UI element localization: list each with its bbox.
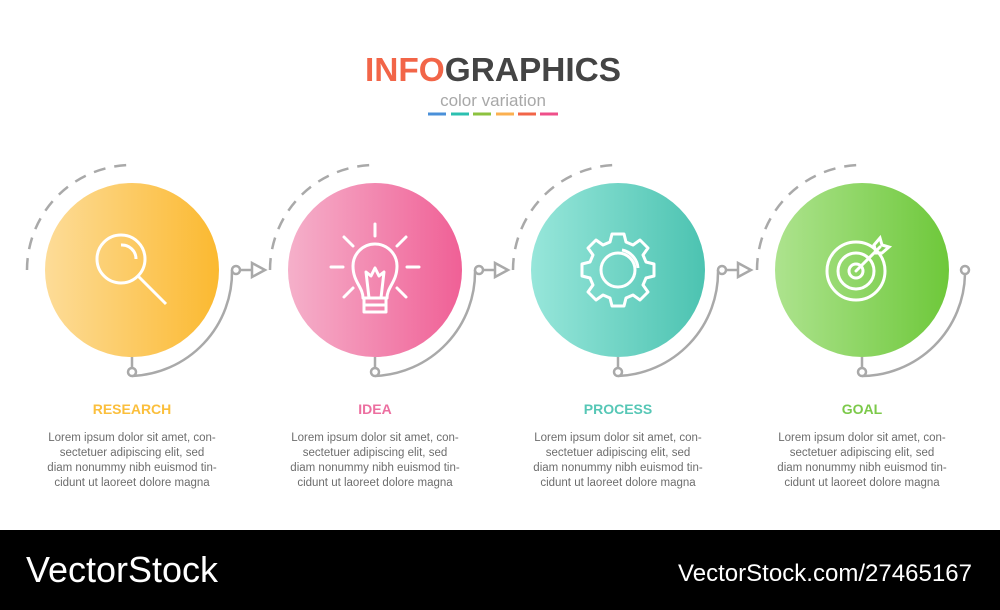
text goal: diam nonummy nibh euismod tin- xyxy=(777,462,947,474)
text research: cidunt ut laoreet dolore magna xyxy=(54,477,210,489)
text goal: sectetuer adipiscing elit, sed xyxy=(790,447,934,459)
text idea: cidunt ut laoreet dolore magna xyxy=(297,477,453,489)
text goal: cidunt ut laoreet dolore magna xyxy=(784,477,940,489)
label research: RESEARCH xyxy=(93,401,171,417)
title: INFOGRAPHICS xyxy=(365,51,621,88)
connectors 3 xyxy=(513,165,751,376)
icon: light bulb xyxy=(331,224,419,312)
footer bar xyxy=(0,530,1000,610)
circle 1 xyxy=(45,183,219,357)
text process: sectetuer adipiscing elit, sed xyxy=(546,447,690,459)
connectors 1 xyxy=(27,165,265,376)
step 3: process xyxy=(513,165,751,489)
step 1: research xyxy=(27,165,265,489)
text process: Lorem ipsum dolor sit amet, con- xyxy=(534,432,702,444)
icon: magnifier xyxy=(97,235,166,304)
text research: sectetuer adipiscing elit, sed xyxy=(60,447,204,459)
step 4: goal xyxy=(757,165,969,489)
text process: diam nonummy nibh euismod tin- xyxy=(533,462,703,474)
text research: Lorem ipsum dolor sit amet, con- xyxy=(48,432,216,444)
footer logo: VectorStock xyxy=(26,549,219,590)
text idea: sectetuer adipiscing elit, sed xyxy=(303,447,447,459)
text research: diam nonummy nibh euismod tin- xyxy=(47,462,217,474)
circle 4 xyxy=(775,183,949,357)
label goal: GOAL xyxy=(842,401,883,417)
text process: cidunt ut laoreet dolore magna xyxy=(540,477,696,489)
step 2: idea xyxy=(270,165,508,489)
title xyxy=(365,51,621,114)
icon: target xyxy=(827,238,889,300)
footer id: VectorStock.com/27465167 xyxy=(678,560,972,587)
connectors 4 xyxy=(757,165,969,376)
icon: gear xyxy=(582,234,654,306)
subtitle: color variation xyxy=(440,91,546,110)
text idea: Lorem ipsum dolor sit amet, con- xyxy=(291,432,459,444)
label idea: IDEA xyxy=(358,401,392,417)
circle 2 xyxy=(288,183,462,357)
circle 3 xyxy=(531,183,705,357)
text goal: Lorem ipsum dolor sit amet, con- xyxy=(778,432,946,444)
label process: PROCESS xyxy=(584,401,652,417)
color legend bars xyxy=(428,112,558,116)
text idea: diam nonummy nibh euismod tin- xyxy=(290,462,460,474)
connectors 2 xyxy=(270,165,508,376)
